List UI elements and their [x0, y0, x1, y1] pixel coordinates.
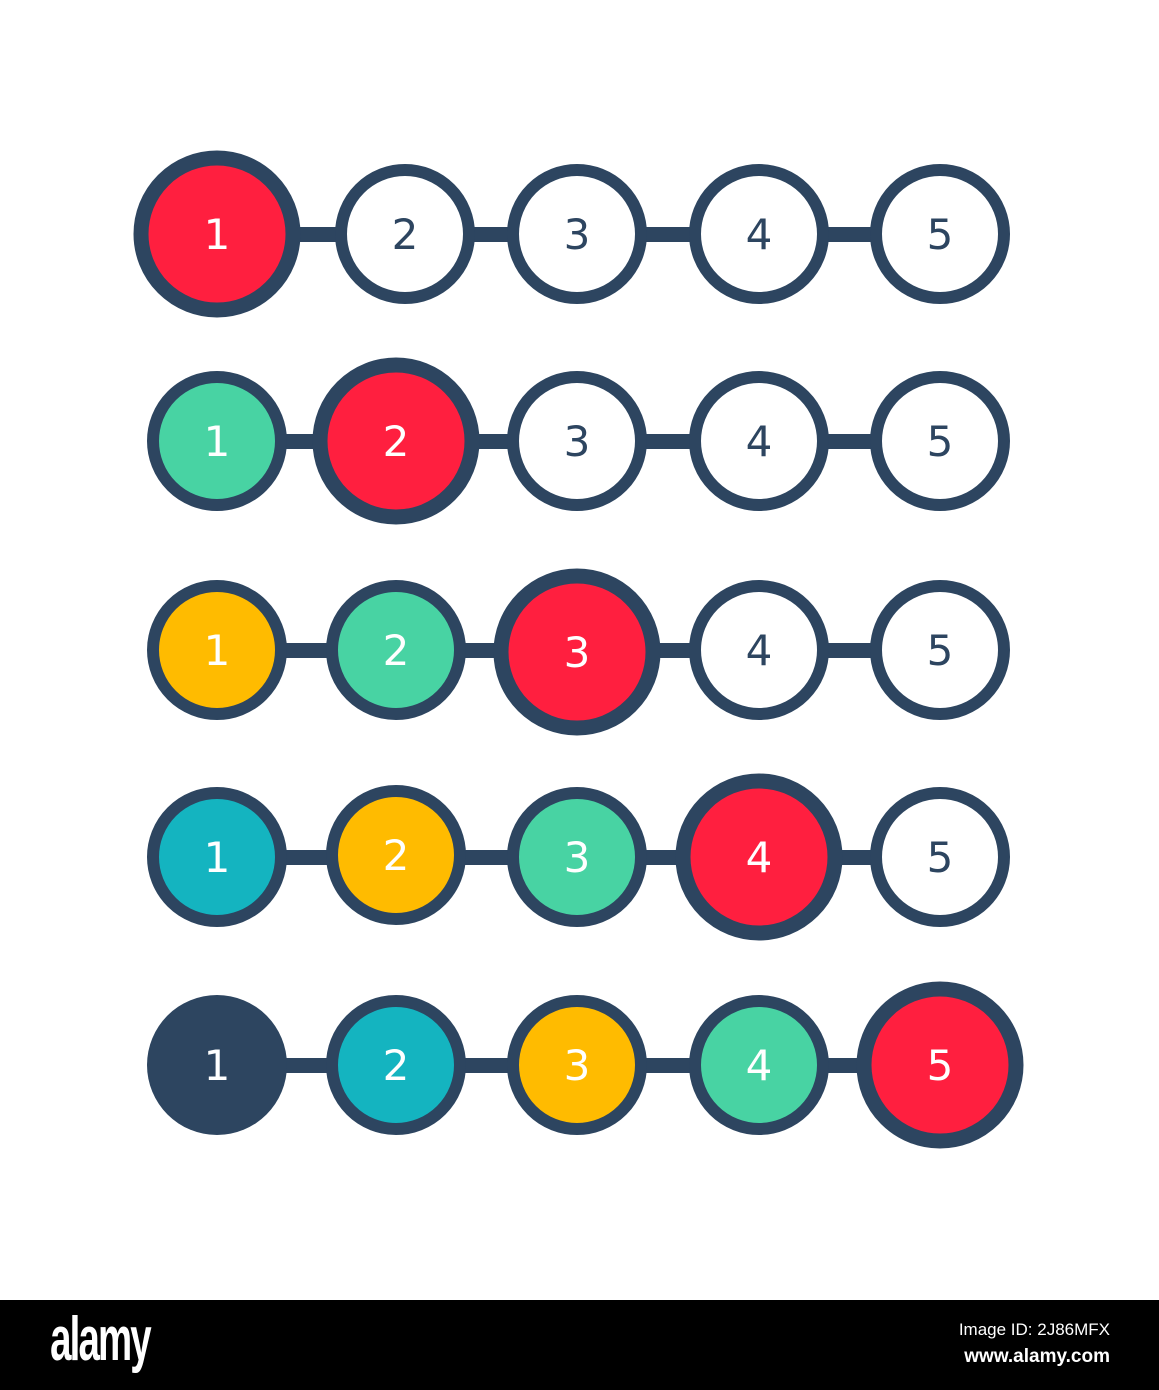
- step 4: [695, 377, 823, 505]
- step 4: 4: [746, 417, 772, 466]
- step 5: [876, 793, 1004, 921]
- step 4: [695, 1001, 823, 1129]
- step 2: 2: [383, 626, 409, 675]
- image id: Image ID: 2J86MFX: [959, 1320, 1110, 1339]
- step 4: [695, 170, 823, 298]
- step 2: [332, 791, 460, 919]
- step 1: 1: [204, 210, 230, 259]
- step 1: [153, 586, 281, 714]
- step 2: 2: [392, 210, 418, 259]
- step 3: 3: [564, 628, 590, 677]
- step 1: 1: [204, 626, 230, 675]
- step 1: [153, 793, 281, 921]
- step 3: 3: [564, 1041, 590, 1090]
- step 3: [513, 377, 641, 505]
- step 4: [683, 781, 835, 933]
- step 3: 3: [564, 210, 590, 259]
- step 5: 5: [927, 833, 953, 882]
- step 3: [501, 576, 653, 728]
- step 5: [876, 586, 1004, 714]
- row 3: step 3 active: [153, 576, 1004, 728]
- step 2: [341, 170, 469, 298]
- step 2: 2: [383, 417, 409, 466]
- step 1: 1: [204, 417, 230, 466]
- step 1: [141, 158, 293, 310]
- footer bar: [0, 1300, 1159, 1390]
- step 5: [864, 989, 1016, 1141]
- step 5: 5: [927, 626, 953, 675]
- step 2: [320, 365, 472, 517]
- row 4: step 4 active: [153, 781, 1004, 933]
- step 3: [513, 1001, 641, 1129]
- logo: alamy: [50, 1304, 152, 1373]
- row 5: step 5 active: [147, 989, 1016, 1141]
- step 1: [153, 377, 281, 505]
- step 1: [147, 995, 287, 1135]
- row 1: step 1 active: [141, 158, 1004, 310]
- step 5: 5: [927, 210, 953, 259]
- step 3: [513, 170, 641, 298]
- step 4: 4: [746, 210, 772, 259]
- step 2: 2: [383, 1041, 409, 1090]
- step 5: [876, 170, 1004, 298]
- step 3: 3: [564, 833, 590, 882]
- step 5: [876, 377, 1004, 505]
- step 4: 4: [746, 1041, 772, 1090]
- step 1: 1: [204, 833, 230, 882]
- step 2: [332, 1001, 460, 1129]
- step 4: [695, 586, 823, 714]
- row 2: step 2 active: [153, 365, 1004, 517]
- step 4: 4: [746, 833, 772, 882]
- step 2: 2: [383, 831, 409, 880]
- step 5: 5: [927, 1041, 953, 1090]
- step 5: 5: [927, 417, 953, 466]
- step 2: [332, 586, 460, 714]
- step 3: 3: [564, 417, 590, 466]
- step 1: 1: [204, 1041, 230, 1090]
- website: www.alamy.com: [963, 1346, 1110, 1367]
- step 4: 4: [746, 626, 772, 675]
- step 3: [513, 793, 641, 921]
